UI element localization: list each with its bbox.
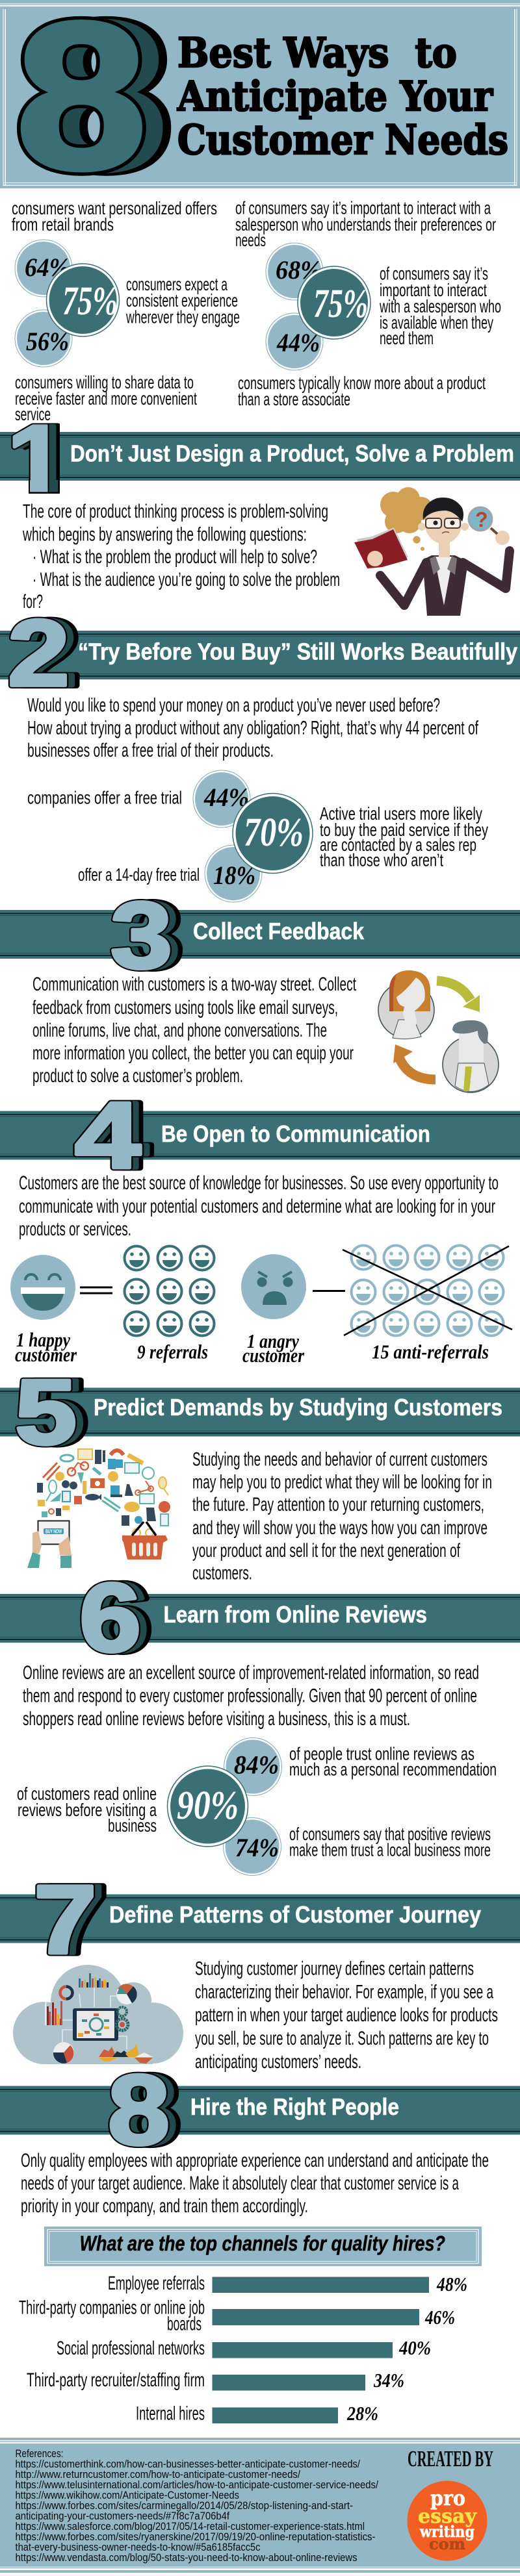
- section 8 heading: [0, 2054, 520, 2166]
- text: share data: consumers willing to share data to: [15, 372, 194, 392]
- chart heading box: [44, 2227, 482, 2266]
- section 7 body text: anticipating customers’ needs.: [195, 2051, 361, 2073]
- number 6: 6: [90, 1563, 152, 1673]
- section 1 heading: [0, 423, 520, 494]
- bar: internal hires: [136, 2402, 378, 2425]
- references list: anticipating-your-customers-needs/#7f8c7a706b4f: [16, 2510, 229, 2522]
- heading text: Be Open to Communication: [161, 1120, 430, 1147]
- section 1 body text: · What is the audience you’re going to solve the problem: [32, 569, 340, 590]
- section 3 heading: [0, 882, 520, 988]
- number 3: 3: [110, 882, 172, 988]
- illustration: feedback loop between two people: [378, 970, 499, 1092]
- number 6: 6: [79, 1563, 141, 1673]
- stat: online review circles: 74%: [235, 1833, 279, 1862]
- stat: free trial circles: offer a 14-day free trial: [78, 865, 200, 885]
- text: salesperson preferences: [235, 197, 496, 250]
- stat: free trial circles: than those who aren’t: [320, 850, 443, 870]
- section 7 body text: [195, 1958, 498, 2073]
- number 7: 7: [34, 1865, 97, 1974]
- references list: [16, 2447, 378, 2564]
- number 7: 7: [42, 1865, 104, 1974]
- text: consistent experience: wherever they engage: [125, 307, 240, 327]
- icon: tablet with hands: BUY NOW: [46, 1529, 62, 1534]
- heading text: Define Patterns of Customer Journey: [109, 1901, 481, 1928]
- number 2: 2: [8, 600, 70, 706]
- number 7: 7: [45, 1865, 108, 1974]
- number 2: 2: [19, 600, 81, 706]
- mountain charts: [99, 2044, 153, 2064]
- logo: pro essay writing: pro: [430, 2486, 465, 2510]
- section 3 body text: online forums, live chat, and phone conversations. The: [32, 1020, 327, 1041]
- text: share data: service: [15, 404, 51, 424]
- bar: employee referrals: Employee referrals: [108, 2273, 205, 2294]
- captions: 1 happy: [16, 1328, 70, 1351]
- number 1: [11, 423, 60, 494]
- references list: https://www.wikihow.com/Anticipate-Customer-Needs: [16, 2489, 239, 2501]
- section 1 body text: [22, 501, 340, 612]
- gears: [116, 2007, 128, 2030]
- product icons arc: [37, 1449, 170, 1537]
- text: available salesperson: need them: [380, 328, 434, 348]
- fifteen anti-referral smileys, crossed out: [343, 1246, 512, 1335]
- number 2: 2: [12, 600, 73, 706]
- number 6: 6: [79, 1563, 141, 1673]
- section 7 heading: [0, 1865, 520, 1974]
- references list: https://customerthink.com/how-can-businesses-better-anticipate-customer-needs/: [16, 2458, 360, 2470]
- stat circles: 68, 75, 44 percent: 75%: [313, 282, 368, 326]
- main title: [177, 29, 508, 164]
- illustration: online shopping icons into basket: [27, 1449, 170, 1568]
- number 5: 5: [26, 1361, 88, 1464]
- number 5: 5: [15, 1361, 77, 1464]
- stat: online review circles: 90%: [177, 1784, 239, 1828]
- section 8 body text: [21, 2150, 489, 2217]
- arrow: orange: [393, 1044, 436, 1080]
- references list: http://www.returncustomer.com/how-to-anticipate-customer-needs/: [16, 2468, 300, 2481]
- number 4: 4: [75, 1083, 141, 1189]
- text: consistent experience: consumers expect a: [126, 274, 228, 294]
- number 3: 3: [122, 882, 183, 988]
- number 1: 1: [18, 406, 77, 512]
- section 5 heading: [0, 1361, 520, 1464]
- section 3 body text: [32, 974, 356, 1087]
- section 3 body text: more information you collect, the better you can equip your: [32, 1042, 354, 1064]
- stat circles: 64, 75, 56 percent: 64%: [25, 253, 70, 282]
- number 3: 3: [118, 882, 180, 988]
- stat circles: 68, 75, 44 percent: [266, 243, 370, 370]
- stat: free trial circles: 18%: [213, 861, 255, 890]
- minus sign: [313, 1290, 345, 1292]
- bar: third-party companies: 46%: [424, 2306, 455, 2329]
- footer: [0, 2438, 520, 2573]
- icon: happy face: [10, 1255, 75, 1320]
- text: share data: receive faster and more convenient: [15, 388, 197, 409]
- section 1 body text: which begins by answering the following questions:: [22, 524, 307, 546]
- stat: online review circles: of customers read online: [17, 1784, 157, 1804]
- number 5: 5: [22, 1361, 84, 1464]
- bar: social professional networks: [57, 2336, 431, 2359]
- text: salesperson preferences: needs: [235, 230, 266, 250]
- bar: third-party companies: Third-party companies or online job: [19, 2297, 205, 2319]
- number 5: 5: [19, 1361, 81, 1464]
- references list: https://www.salesforce.com/blog/2017/05/14-retail-customer-experience-stats.html: [16, 2520, 365, 2532]
- bar: social professional networks: 40%: [398, 2336, 431, 2359]
- logo: pro essay writing: writing: [419, 2522, 474, 2541]
- logo: pro essay writing: [407, 2481, 488, 2560]
- arrow: green: [437, 981, 480, 1012]
- bar charts: [45, 1973, 109, 2025]
- number 4: 4: [75, 1083, 141, 1189]
- stat: free trial circles: 70%: [244, 811, 304, 855]
- connector lines: [62, 1988, 127, 2049]
- equals sign: [80, 1286, 112, 1294]
- section 4 heading: [0, 1083, 520, 1189]
- man avatar: [443, 1020, 499, 1092]
- text: personalized offers: [12, 198, 217, 234]
- bar chart: top channels for quality hires: [19, 2273, 467, 2425]
- number 4: 4: [85, 1083, 151, 1189]
- references list: https://www.forbes.com/sites/carminegallo/2014/05/28/stop-listening-and-start-: [16, 2499, 353, 2512]
- number 8: 8: [108, 2054, 170, 2166]
- bar: social professional networks: Social professional networks: [57, 2338, 205, 2359]
- section 1 body text: · What is the problem the product will help to solve?: [32, 546, 317, 568]
- number 3: 3: [114, 882, 176, 988]
- bar: third-party recruiter: [27, 2369, 404, 2392]
- referrals diagram: [10, 1246, 512, 1367]
- references list: https://www.vendasta.com/blog/50-stats-you-need-to-know-about-online-reviews: [16, 2551, 358, 2564]
- text: know more than associate: than a store associate: [238, 389, 350, 409]
- number 8: 8: [112, 2054, 174, 2166]
- icon: tablet with hands: [27, 1521, 72, 1568]
- head: [439, 539, 450, 557]
- number 8: 8: [115, 2054, 177, 2166]
- text: share data: [15, 372, 197, 424]
- number 4: 4: [79, 1083, 145, 1189]
- section 4 body text: products or services.: [19, 1219, 131, 1240]
- section 3 body text: product to solve a customer’s problem.: [32, 1065, 243, 1087]
- heading text: Learn from Online Reviews: [164, 1601, 427, 1628]
- stat circles: 64, 75, 56 percent: [15, 240, 120, 367]
- header banner: [0, 0, 520, 213]
- bar: third-party companies: [19, 2297, 455, 2335]
- bar: third-party recruiter: Third-party recruiter/staffing firm: [27, 2369, 205, 2391]
- bar: internal hires: Internal hires: [136, 2403, 205, 2425]
- number 2: 2: [15, 600, 77, 706]
- stat circles: 68, 75, 44 percent: 44%: [276, 328, 320, 357]
- tablet screen: [73, 2008, 118, 2041]
- text: personalized offers: consumers want personalized offers: [12, 198, 217, 218]
- main title: Best Ways to: [177, 29, 457, 77]
- references list: https://www.telusinternational.com/articles/how-to-anticipate-customer-service-needs/: [16, 2479, 378, 2491]
- stat: free trial circles: 44%: [203, 783, 249, 812]
- captions: 1 angry: [247, 1330, 299, 1352]
- number 6: 6: [86, 1563, 149, 1673]
- number 1: 1: [7, 406, 67, 512]
- panel: consumer statistics: [12, 197, 501, 424]
- number 8: 8: [119, 2054, 181, 2166]
- chart heading box: What are the top channels for quality hires?: [79, 2232, 445, 2255]
- number 8: 8: [108, 2054, 170, 2166]
- stat circles: 68, 75, 44 percent: 68%: [276, 255, 321, 284]
- section 6 heading: [0, 1563, 520, 1673]
- number 6: 6: [83, 1563, 145, 1673]
- references list: https://www.forbes.com/sites/ryanerskine/2017/09/19/20-online-reputation-statistics-: [16, 2531, 376, 2543]
- section 8 body text: priority in your company, and train them accordingly.: [21, 2195, 308, 2217]
- section 2 body text: [27, 695, 479, 761]
- text: available salesperson: [379, 264, 501, 348]
- captions: 9 referrals: [137, 1341, 208, 1363]
- illustration: analytics cloud: [13, 1965, 183, 2064]
- stat circles: 64, 75, 56 percent: 75%: [62, 279, 118, 323]
- bar: internal hires: 28%: [346, 2402, 378, 2425]
- stat circles: 64, 75, 56 percent: 56%: [26, 327, 69, 356]
- text: personalized offers: from retail brands: [12, 214, 114, 234]
- bar: employee referrals: 48%: [436, 2273, 467, 2295]
- bar: third-party companies: boards: [167, 2314, 202, 2335]
- woman avatar: [378, 970, 434, 1039]
- bar: third-party recruiter: 34%: [373, 2369, 404, 2392]
- section 2 heading: [0, 600, 520, 706]
- captions: 15 anti-referrals: [372, 1341, 489, 1363]
- number 1: 1: [11, 406, 70, 512]
- number 2: 2: [8, 600, 70, 706]
- book: [357, 527, 408, 569]
- section 1 body text: The core of product thinking process is problem-solving: [23, 501, 328, 522]
- stat: online review circles: business: [108, 1815, 157, 1836]
- logo: pro essay writing: essay: [418, 2505, 478, 2528]
- references list: References:: [16, 2447, 64, 2460]
- stat: online review circles: reviews before visiting a: [18, 1800, 157, 1820]
- stat: free trial circles: companies offer a free trial: [27, 787, 182, 808]
- stat: online review circles: 84%: [234, 1750, 279, 1780]
- captions: customer: [15, 1343, 77, 1366]
- icon: angry face: [241, 1254, 306, 1319]
- text: consistent experience: [125, 274, 240, 327]
- text: consistent experience: consistent experience: [126, 290, 238, 310]
- stat: online review circles: [17, 1738, 497, 1876]
- number 7: 7: [34, 1865, 97, 1974]
- donut and pie charts: [53, 1984, 137, 2064]
- section 6 body text: [23, 1662, 479, 1730]
- captions: [15, 1328, 489, 1367]
- suit: [380, 551, 510, 605]
- number 5: 5: [15, 1361, 77, 1464]
- magnifier with question mark: [495, 531, 510, 545]
- section 5 body text: [192, 1448, 492, 1584]
- section 3 body text: feedback from customers using tools like email surveys,: [32, 997, 338, 1018]
- section 2 body text: businesses offer a free trial of their products.: [27, 740, 274, 761]
- references list: that-every-business-owner-needs-to-know/#5a6185facc5c: [16, 2541, 261, 2553]
- text: know more than associate: [238, 373, 486, 409]
- section 4 body text: [19, 1172, 499, 1240]
- heading text: Collect Feedback: [193, 918, 365, 944]
- logo: pro essay writing: com: [429, 2534, 465, 2553]
- thought cloud: [380, 487, 433, 551]
- nine referral smileys: [125, 1246, 214, 1335]
- section 5 body text: customers.: [192, 1563, 252, 1584]
- number 3: 3: [110, 882, 172, 988]
- section 1 body text: for?: [23, 591, 43, 612]
- heading text: Hire the Right People: [190, 2093, 399, 2120]
- number 4: 4: [82, 1083, 148, 1189]
- stat: free trial circles: [27, 770, 488, 902]
- illustration: thinking man with book and magnifier: [354, 487, 510, 616]
- icon: basket: [122, 1522, 168, 1559]
- number 1: 1: [7, 406, 67, 512]
- cloud shape: [13, 1965, 183, 2064]
- section 3 body text: Communication with customers is a two-way street. Collect: [32, 974, 356, 995]
- illustration: thinking man with book and magnifier: ?: [475, 508, 488, 531]
- number 7: 7: [38, 1865, 101, 1974]
- bar: employee referrals: [108, 2273, 467, 2295]
- captions: customer: [242, 1344, 305, 1367]
- number 1: 1: [14, 406, 74, 512]
